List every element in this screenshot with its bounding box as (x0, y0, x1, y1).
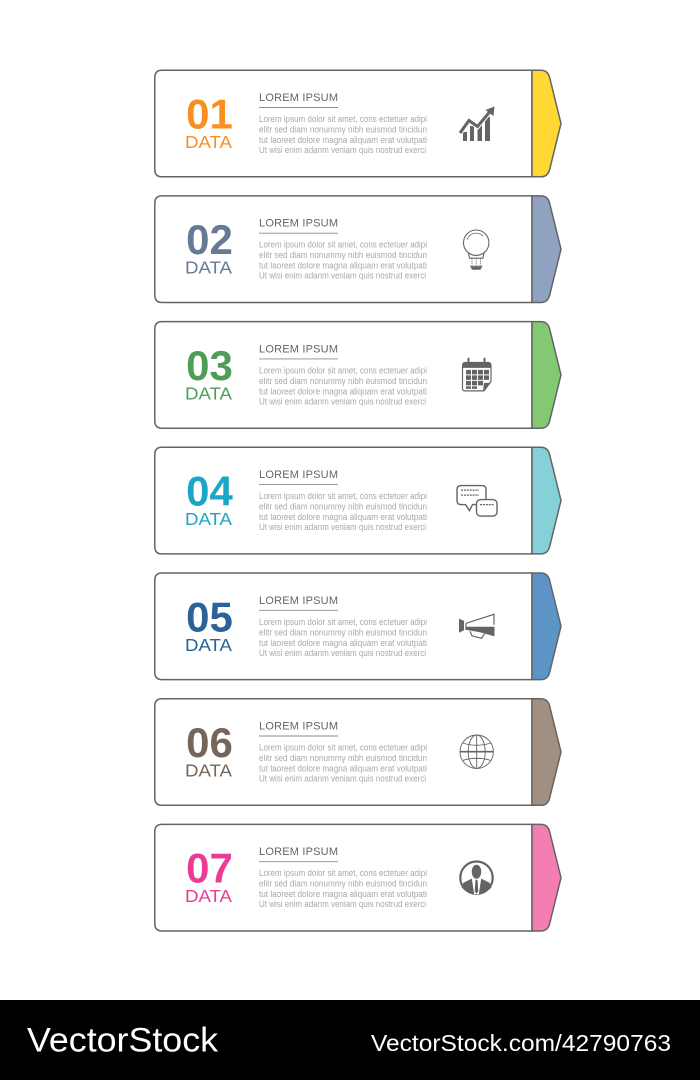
heading underline (259, 232, 338, 234)
body text: elitr sed diam nonummy nibh euismod tincidun (259, 376, 427, 386)
icon: megaphone (459, 614, 494, 638)
body text: Ut wisi enim adanm veniam quis nostrud exerci (259, 774, 426, 784)
heading: LOREM IPSUM (259, 469, 338, 481)
arrow tab: blue (532, 573, 561, 680)
body text: Lorem ipsum dolor sit amet, cons ectetuer adipi (259, 742, 427, 752)
heading underline (259, 106, 338, 108)
body text: Ut wisi enim adanm veniam quis nostrud exerci (259, 522, 426, 532)
number 01: 01 (186, 90, 233, 138)
label DATA: DATA (185, 258, 232, 278)
heading underline (259, 484, 338, 486)
panel: item 03 (155, 322, 561, 428)
body text (259, 868, 427, 909)
icon: globe (460, 735, 493, 768)
heading underline (259, 609, 338, 611)
label DATA: DATA (185, 760, 232, 780)
label DATA: DATA (185, 132, 232, 152)
panel: item 05 (155, 573, 561, 680)
arrow tab: yellow (532, 70, 561, 177)
arrow tab: pink (532, 824, 561, 931)
body text: tut laoreet dolore magna aliquam erat volutpati (259, 261, 427, 271)
label DATA: DATA (185, 886, 232, 906)
heading: LOREM IPSUM (259, 92, 338, 104)
body text (259, 742, 427, 784)
number 04: 04 (186, 468, 233, 515)
panel: item 02 (155, 196, 561, 302)
icon: light bulb (464, 230, 489, 270)
body text: Ut wisi enim adanm veniam quis nostrud exerci (259, 271, 426, 281)
card outline (155, 824, 532, 931)
arrow tab: slate blue (532, 196, 561, 302)
label DATA: DATA (185, 383, 232, 403)
body text: Lorem ipsum dolor sit amet, cons ectetuer adipi (259, 491, 427, 501)
body text: Ut wisi enim adanm veniam quis nostrud exerci (259, 145, 426, 155)
heading underline (259, 358, 338, 360)
body text (259, 240, 427, 281)
body text: tut laoreet dolore magna aliquam erat volutpati (259, 386, 427, 396)
body text: elitr sed diam nonummy nibh euismod tincidun (259, 250, 427, 260)
number 02: 02 (186, 216, 233, 263)
body text (259, 114, 427, 155)
arrow tab: taupe (532, 699, 561, 805)
number 03: 03 (186, 342, 233, 389)
arrow tab: aqua (532, 447, 561, 554)
icon: speech bubbles (457, 486, 497, 516)
icon: rising chart (460, 106, 494, 141)
panel: item 07 (155, 824, 561, 931)
heading: LOREM IPSUM (259, 846, 338, 858)
heading underline (259, 735, 338, 737)
card outline (155, 196, 532, 302)
body text: tut laoreet dolore magna aliquam erat volutpati (259, 135, 427, 145)
body text: elitr sed diam nonummy nibh euismod tincidun (259, 753, 427, 763)
body text: Ut wisi enim adanm veniam quis nostrud exerci (259, 648, 426, 658)
panel: item 04 (155, 447, 561, 554)
body text: Ut wisi enim adanm veniam quis nostrud exerci (259, 899, 426, 909)
number 07: 07 (186, 845, 233, 892)
label DATA: DATA (185, 635, 232, 655)
body text: Lorem ipsum dolor sit amet, cons ectetuer adipi (259, 868, 427, 878)
body text: tut laoreet dolore magna aliquam erat volutpati (259, 638, 427, 648)
footer bar (0, 1000, 700, 1080)
label DATA: DATA (185, 509, 232, 529)
panel: item 01 (155, 70, 561, 177)
body text: elitr sed diam nonummy nibh euismod tincidun (259, 627, 427, 637)
card outline (155, 447, 532, 554)
heading: LOREM IPSUM (259, 595, 338, 607)
number 06: 06 (186, 719, 233, 766)
heading: LOREM IPSUM (259, 720, 338, 732)
card outline (155, 322, 532, 428)
heading: LOREM IPSUM (259, 343, 338, 355)
number 05: 05 (186, 593, 233, 640)
body text: elitr sed diam nonummy nibh euismod tincidun (259, 124, 427, 134)
body text: tut laoreet dolore magna aliquam erat volutpati (259, 889, 427, 899)
body text: Lorem ipsum dolor sit amet, cons ectetuer adipi (259, 114, 427, 124)
card outline (155, 70, 532, 177)
body text: tut laoreet dolore magna aliquam erat volutpati (259, 764, 427, 774)
body text: Lorem ipsum dolor sit amet, cons ectetuer adipi (259, 240, 427, 250)
footer brand: VectorStock (27, 1022, 219, 1060)
body text: Lorem ipsum dolor sit amet, cons ectetuer adipi (259, 617, 427, 627)
body text: Ut wisi enim adanm veniam quis nostrud exerci (259, 396, 426, 406)
body text: elitr sed diam nonummy nibh euismod tincidun (259, 879, 427, 889)
body text (259, 365, 427, 406)
card outline (155, 699, 532, 805)
icon: businessman in circle (460, 862, 493, 894)
arrow tab: green (532, 322, 561, 428)
footer url: VectorStock.com/42790763 (371, 1030, 671, 1056)
body text: tut laoreet dolore magna aliquam erat volutpati (259, 512, 427, 522)
card outline (155, 573, 532, 680)
heading: LOREM IPSUM (259, 218, 338, 230)
body text (259, 491, 427, 532)
panel: item 06 (155, 699, 561, 805)
heading underline (259, 861, 338, 863)
body text: Lorem ipsum dolor sit amet, cons ectetuer adipi (259, 365, 427, 375)
body text: elitr sed diam nonummy nibh euismod tincidun (259, 502, 427, 512)
body text (259, 617, 427, 658)
icon: calendar (462, 358, 492, 391)
